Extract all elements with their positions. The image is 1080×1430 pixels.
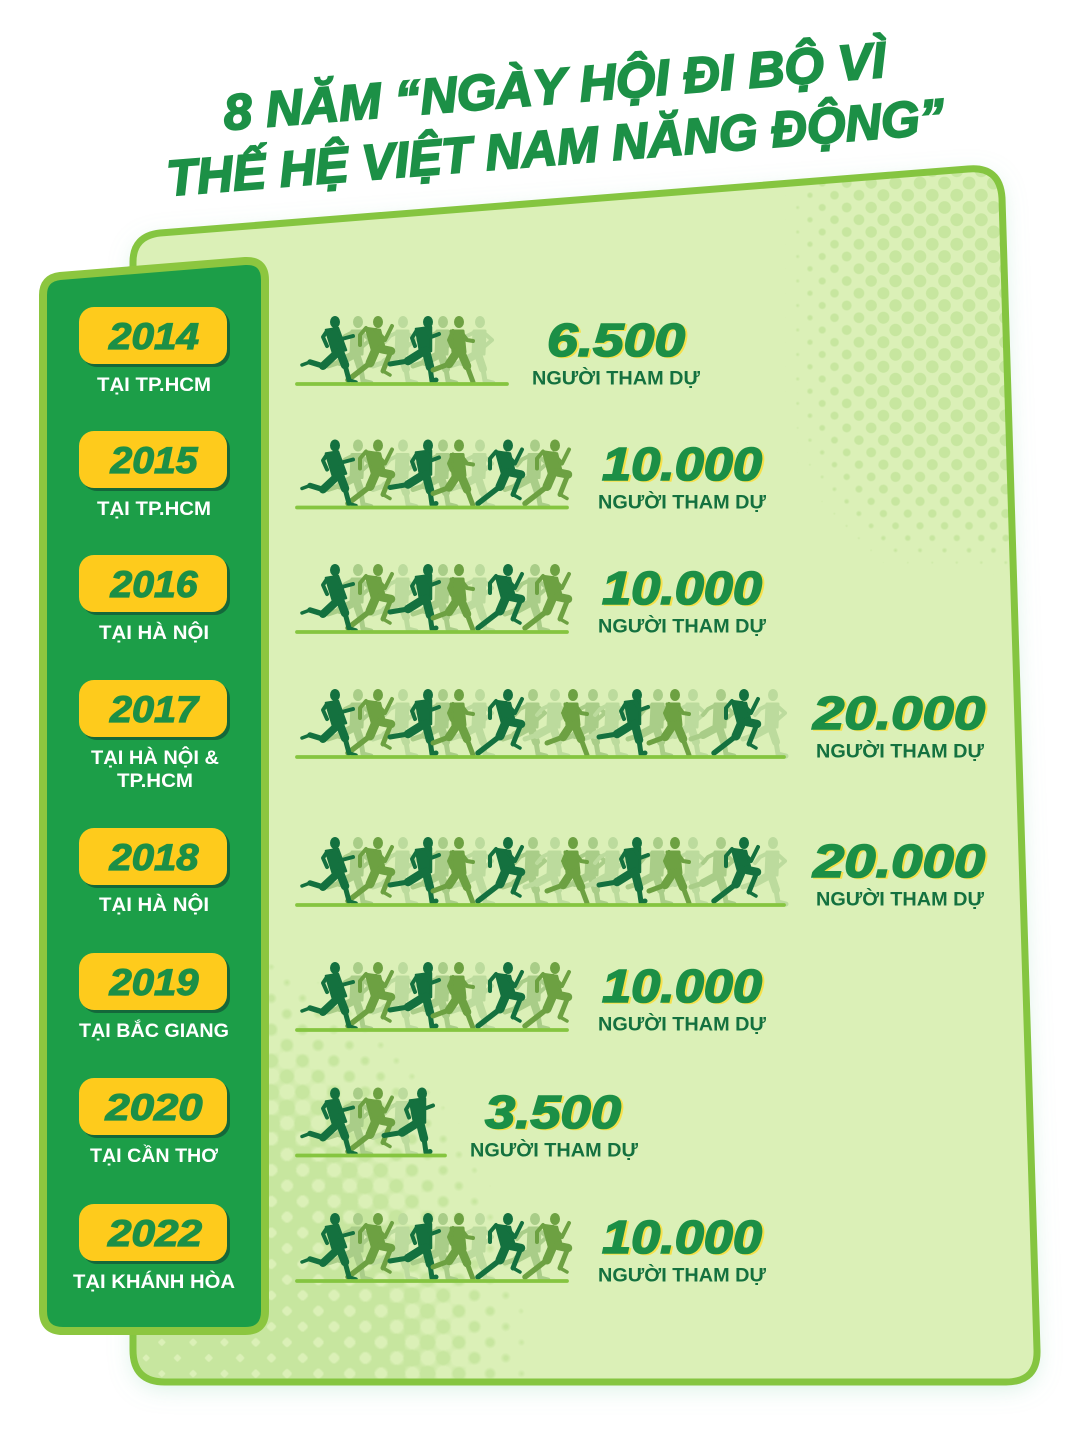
label: NGƯỜI THAM DỰ: [598, 614, 767, 638]
runners: 10.000: [297, 564, 569, 632]
label: NGƯỜI THAM DỰ: [598, 490, 767, 514]
title: [160, 27, 946, 207]
value 10.000: 10.000: [602, 438, 762, 490]
label: NGƯỜI THAM DỰ: [532, 366, 701, 390]
year badge 2018: [79, 828, 230, 888]
label: NGƯỜI THAM DỰ: [816, 886, 985, 910]
value 10.000: 10.000: [602, 1211, 762, 1263]
year badge 2019: [79, 953, 230, 1013]
label: NGƯỜI THAM DỰ: [598, 1262, 767, 1286]
runners: 10.000: [297, 440, 569, 508]
row: 2017: [79, 680, 986, 792]
location: TẠI TP.HCM: [97, 499, 211, 520]
runners: 10.000: [297, 962, 569, 1030]
year badge 2020: [79, 1078, 230, 1138]
value 20.000: 20.000: [812, 835, 986, 887]
value 20.000: 20.000: [812, 687, 986, 739]
year badge 2019: 2019: [108, 962, 199, 1003]
label: NGƯỜI THAM DỰ: [598, 1012, 767, 1036]
runners: 20.000: [297, 837, 786, 905]
row: 2015: [79, 431, 767, 520]
location: TẠI HÀ NỘI: [99, 622, 209, 644]
location: TẠI CẦN THƠ: [90, 1145, 219, 1167]
row: 2014: [79, 307, 701, 396]
row: 2016: [79, 555, 767, 644]
year badge 2017: 2017: [109, 689, 201, 730]
runners: 10.000: [297, 1213, 569, 1281]
location: TẠI KHÁNH HÒA: [73, 1271, 235, 1293]
year badge 2015: 2015: [109, 440, 199, 481]
title: 8 NĂM “NGÀY HỘI ĐI BỘ VÌ: [221, 31, 890, 141]
runners: 20.000: [297, 689, 786, 757]
panel: chart background: [125, 160, 1037, 1390]
title: THẾ HỆ VIỆT NAM NĂNG ĐỘNG”: [164, 87, 946, 207]
row: 2018: [79, 828, 986, 916]
location: TẠI BẮC GIANG: [79, 1020, 229, 1042]
location: TẠI TP.HCM: [97, 375, 211, 396]
row: 2020: [79, 1078, 639, 1167]
value 10.000: 10.000: [602, 562, 762, 614]
location: TẠI HÀ NỘI &: [91, 747, 219, 769]
year badge 2020: 2020: [104, 1087, 203, 1128]
year badge 2014: [79, 307, 230, 367]
runners: 3.500: [297, 1088, 445, 1156]
value 10.000: 10.000: [602, 960, 762, 1012]
year badge 2018: 2018: [108, 837, 199, 878]
location: TP.HCM: [117, 771, 193, 792]
year badge 2016: [79, 555, 230, 615]
row: 2019: [79, 953, 767, 1042]
year badge 2017: [79, 680, 230, 740]
year badge 2015: [79, 431, 230, 491]
year badge 2022: 2022: [107, 1213, 202, 1254]
year badge 2022: [79, 1204, 230, 1264]
location: TẠI HÀ NỘI: [99, 894, 209, 916]
value 6.500: 6.500: [547, 314, 685, 366]
label: NGƯỜI THAM DỰ: [816, 738, 985, 762]
value 3.500: 3.500: [485, 1086, 621, 1138]
location: [91, 747, 219, 792]
row: 2022: [73, 1204, 767, 1293]
panel: years sidebar: [43, 261, 265, 1331]
label: NGƯỜI THAM DỰ: [470, 1138, 639, 1162]
runners: 6.500: [297, 316, 507, 384]
year badge 2014: 2014: [108, 316, 199, 357]
year badge 2016: 2016: [109, 564, 198, 605]
